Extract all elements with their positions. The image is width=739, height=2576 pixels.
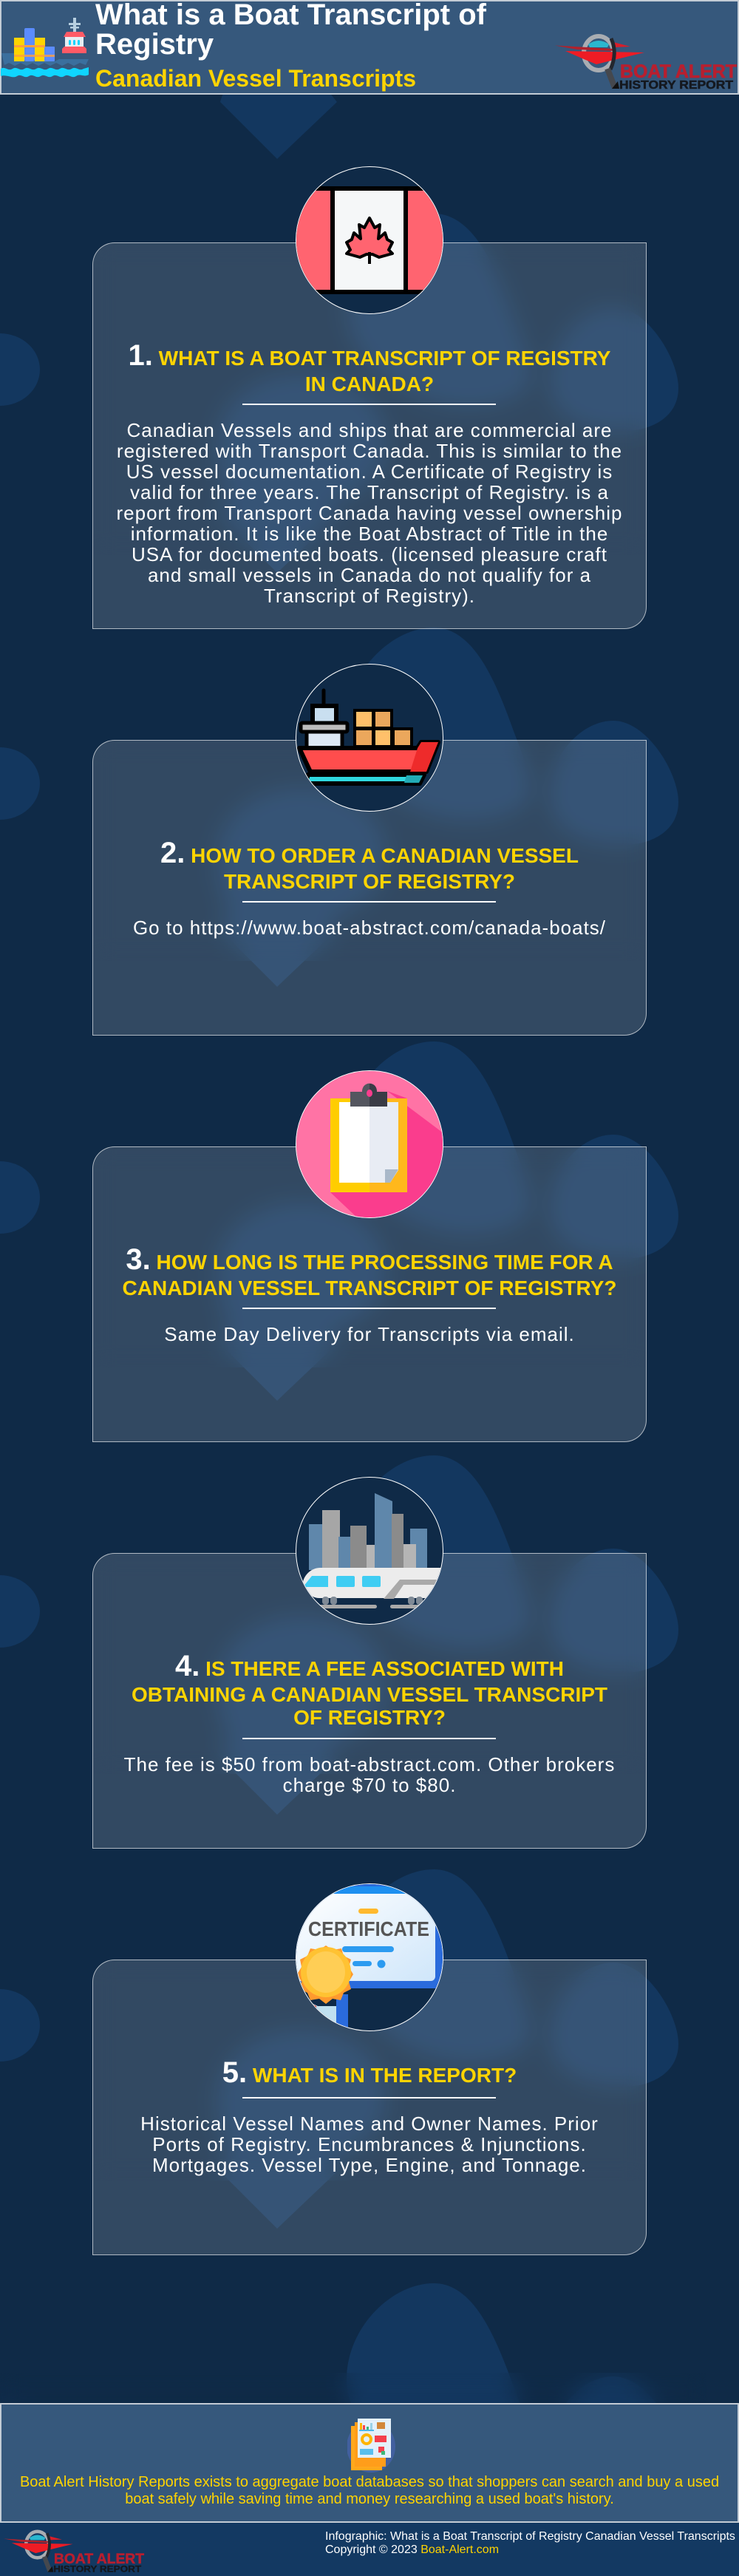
text: credit and copyright bbox=[325, 2530, 735, 2556]
logo: Boat Alert History Report (footer): BOAT ALERT bbox=[54, 2552, 144, 2567]
icon: clipboard bbox=[296, 1070, 443, 1218]
heading: question 2: TRANSCRIPT OF REGISTRY? bbox=[224, 870, 515, 893]
heading: question 4: OF REGISTRY? bbox=[293, 1706, 446, 1729]
icon: cargo ship bbox=[1, 18, 89, 77]
text: answer 1: and small vessels in Canada do not qualify for a bbox=[148, 564, 591, 586]
text: about statement bbox=[20, 2474, 719, 2507]
text: credit and copyright: Copyright © 2023 Boat-Alert.com bbox=[325, 2543, 499, 2556]
title bbox=[95, 0, 486, 61]
text: answer 5 bbox=[140, 2113, 599, 2176]
panel: question 4 bbox=[92, 1553, 647, 1849]
icon: container ship bbox=[296, 664, 443, 812]
logo: Boat Alert History Report (header) bbox=[555, 34, 738, 92]
heading: question 3: 3. HOW LONG IS THE PROCESSING TIME FOR A bbox=[126, 1243, 613, 1276]
logo: Boat Alert History Report (header): HISTORY REPORT bbox=[619, 79, 734, 92]
icon: certificate: CERTIFICATE bbox=[308, 1917, 429, 1940]
text: answer 1: USA for documented boats. (licensed pleasure craft bbox=[132, 543, 607, 565]
panel: question 3 bbox=[92, 1146, 647, 1442]
icon: Canadian flag bbox=[296, 166, 443, 314]
icon: report pages bbox=[347, 2419, 395, 2473]
panel: question 5 bbox=[92, 1960, 647, 2255]
header banner bbox=[0, 0, 739, 95]
footer bar bbox=[0, 2523, 739, 2576]
text: answer 4: The fee is $50 from boat-abstract.com. Other brokers bbox=[124, 1753, 615, 1775]
text: answer 1: Transcript of Registry). bbox=[264, 585, 475, 607]
panel: question 1 bbox=[92, 242, 647, 629]
heading: question 4: OBTAINING A CANADIAN VESSEL TRANSCRIPT bbox=[132, 1683, 607, 1706]
panel: about Boat Alert bbox=[0, 2403, 739, 2523]
text: about statement: Boat Alert History Reports exists to aggregate boat databases so that shoppers can search and buy a used bbox=[20, 2474, 719, 2490]
heading: question 2: 2. HOW TO ORDER A CANADIAN VESSEL bbox=[160, 837, 579, 869]
logo: Boat Alert History Report (footer): HISTORY REPORT bbox=[53, 2564, 142, 2575]
text: answer 3: Same Day Delivery for Transcripts via email. bbox=[164, 1323, 575, 1345]
heading: question 1 bbox=[129, 339, 610, 395]
text: credit and copyright: Infographic: What is a Boat Transcript of Registry Canadian Vessel Transcripts bbox=[325, 2530, 735, 2543]
heading: question 3 bbox=[123, 1243, 616, 1299]
icon: city and train bbox=[296, 1477, 443, 1625]
logo: Boat Alert History Report (footer) bbox=[4, 2529, 145, 2575]
heading: question 2 bbox=[160, 837, 579, 893]
text: answer 4: charge $70 to $80. bbox=[283, 1774, 456, 1796]
panel: question 2 bbox=[92, 740, 647, 1036]
text: answer 1: valid for three years. The Transcript of Registry. is a bbox=[130, 481, 609, 503]
icon: certificate bbox=[296, 1883, 443, 2031]
text: about statement: boat safely while saving time and money researching a used boat's history. bbox=[125, 2491, 614, 2507]
heading: question 3: CANADIAN VESSEL TRANSCRIPT OF REGISTRY? bbox=[123, 1277, 616, 1299]
text: answer 5: Historical Vessel Names and Owner Names. Prior bbox=[140, 2113, 599, 2135]
heading: question 4: 4. IS THERE A FEE ASSOCIATED WITH bbox=[175, 1650, 564, 1682]
heading: question 1: IN CANADA? bbox=[305, 373, 434, 395]
text: answer 5: Ports of Registry. Encumbrances & Injunctions. bbox=[152, 2133, 587, 2155]
text: answer 1: information. It is like the Boat Abstract of Title in the bbox=[131, 523, 608, 545]
heading: question 1: 1. WHAT IS A BOAT TRANSCRIPT OF REGISTRY bbox=[129, 339, 610, 372]
text: answer 4 bbox=[124, 1753, 615, 1796]
heading: question 4 bbox=[132, 1650, 607, 1729]
logo: Boat Alert History Report (header): BOAT ALERT bbox=[620, 61, 737, 82]
text: answer 1: US vessel documentation. A Certificate of Registry is bbox=[126, 461, 613, 483]
title: Registry bbox=[95, 28, 214, 61]
subtitle: Canadian Vessel Transcripts bbox=[95, 65, 416, 92]
text: answer 1 bbox=[117, 419, 622, 607]
text: answer 1: registered with Transport Canada. This is similar to the bbox=[117, 440, 622, 462]
text: answer 1: Canadian Vessels and ships that are commercial are bbox=[127, 419, 612, 441]
heading: question 5: 5. WHAT IS IN THE REPORT? bbox=[222, 2056, 517, 2089]
text: answer 2: Go to https://www.boat-abstract.com/canada-boats/ bbox=[133, 917, 606, 939]
text: answer 1: report from Transport Canada having vessel ownership bbox=[117, 502, 622, 524]
text: answer 5: Mortgages. Vessel Type, Engine, and Tonnage. bbox=[152, 2154, 587, 2176]
